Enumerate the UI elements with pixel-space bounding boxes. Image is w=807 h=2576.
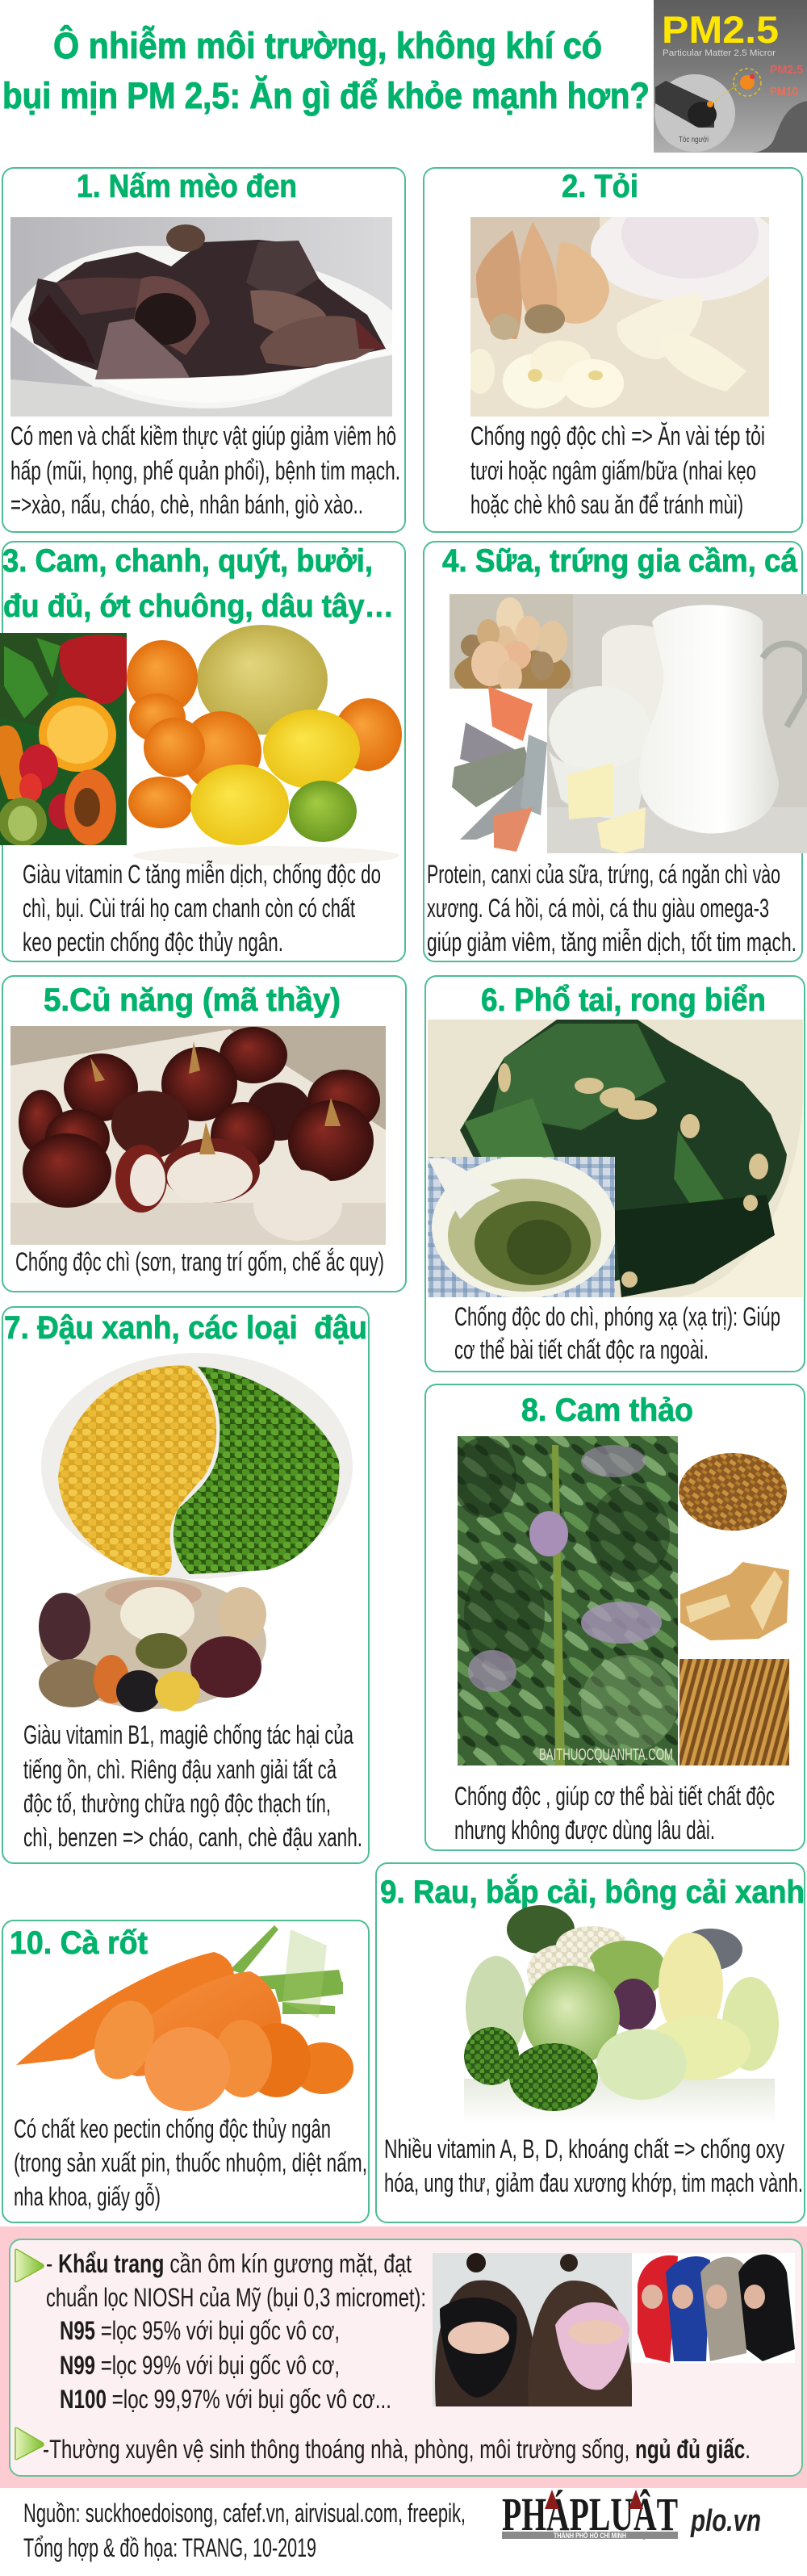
image: PM2.5 diagram: PM10: [770, 85, 798, 98]
image: colored balaclavas: [632, 2253, 795, 2363]
text 3: [23, 860, 381, 957]
advice: mask text: - Khẩu trang cần ôm kín gương mặt, đạt: [46, 2249, 412, 2278]
heading 2: 2. Tỏi: [562, 169, 638, 204]
heading 6: 6. Phổ tai, rong biển: [481, 982, 766, 1018]
text 7: Giàu vitamin B1, magiê chống tác hại của: [23, 1720, 353, 1749]
image: licorice slices: [680, 1562, 789, 1640]
image: carrots: [16, 1925, 353, 2111]
text 7: chì, benzen => cháo, canh, chè đậu xanh.: [23, 1823, 362, 1852]
text 10: [14, 2114, 367, 2211]
image: black fungus in bowl: [10, 217, 392, 417]
panel: 4 Sữa, trứng: [424, 542, 807, 961]
heading 10: 10. Cà rốt: [10, 1925, 148, 1961]
image: water chestnuts: [10, 1026, 386, 1245]
text 10: nha khoa, giấy gỗ): [14, 2182, 161, 2211]
image: PM2.5 diagram: Tóc người: [679, 136, 709, 145]
text 7: tiếng ồn, chì. Riêng đậu xanh giải tất cả: [23, 1755, 337, 1784]
text 5: Chống độc chì (sơn, trang trí gốm, chế ắc quy): [15, 1247, 384, 1276]
heading 1: 1. Nấm mèo đen: [77, 169, 297, 204]
text 2: [470, 421, 765, 519]
text 7: [23, 1720, 362, 1852]
text 10: Có chất keo pectin chống độc thủy ngân: [14, 2114, 331, 2143]
panel: 2 Tỏi: [424, 168, 802, 532]
title: Ô nhiễm môi trường, không khí có: [53, 25, 602, 66]
advice: mask text: N95 =lọc 95% với bụi gốc vô cơ,: [60, 2316, 340, 2345]
image: licorice plant: [452, 1436, 678, 1766]
advice: mask text: N99 =lọc 99% với bụi gốc vô cơ,: [60, 2351, 340, 2380]
text 3: chì, bụi. Cùi trái họ cam chanh còn có chất: [23, 894, 355, 923]
website: plo.vn: [690, 2504, 761, 2538]
title: bụi mịn PM 2,5: Ăn gì để khỏe mạnh hơn?: [2, 75, 650, 116]
source note: Tổng hợp & đồ họa: TRANG, 10-2019: [23, 2533, 316, 2562]
panel: 3 Cam, chanh: [0, 542, 405, 961]
image: licorice plant: BAITHUOCQUANHTA.COM: [539, 1746, 673, 1764]
image: PM2.5 diagram: [654, 0, 807, 153]
image: garlic: [470, 217, 769, 417]
text 7: độc tố, thường chữa ngộ độc thạch tín,: [23, 1789, 331, 1818]
image: milk jug, glass, yogurt and butter: [547, 594, 807, 853]
image: PM2.5 diagram: PM2.5: [770, 63, 803, 77]
image: seaweed soup inset: [428, 1156, 617, 1298]
advice: mask text: [46, 2249, 426, 2414]
image: licorice chips: [679, 1453, 787, 1531]
text 9: [384, 2134, 803, 2197]
source note: [23, 2499, 466, 2562]
image: citrus fruits: [127, 625, 402, 865]
text 1: [10, 421, 400, 519]
logo: Pháp Luật: THÀNH PHỐ HỒ CHÍ MINH: [554, 2531, 626, 2540]
advice: mask text: chuẩn lọc NIOSH của Mỹ (bụi 0,3 micromet):: [46, 2283, 426, 2312]
text 8: [454, 1782, 775, 1845]
logo: Pháp Luật: PHÁPLUẬT: [502, 2488, 678, 2540]
title: [2, 25, 650, 116]
text 3: keo pectin chống độc thủy ngân.: [23, 928, 283, 957]
heading 8: 8. Cam thảo: [521, 1393, 693, 1428]
image: assorted beans: [39, 1577, 266, 1712]
image: salmon and fish: [449, 686, 547, 853]
text 1: =>xào, nấu, cháo, chè, nhân bánh, giò xào..: [10, 490, 363, 519]
logo: Pháp Luật: [502, 2488, 678, 2540]
image: women wearing face masks: [433, 2253, 632, 2406]
heading 5: 5.Củ năng (mã thầy): [44, 982, 341, 1018]
text 10: (trong sản xuất pin, thuốc nhuộm, diệt nấm,: [14, 2148, 367, 2177]
image: PM2.5 diagram: PM2.5: [662, 8, 779, 51]
text 3: Giàu vitamin C tăng miễn dịch, chống độc do: [23, 860, 381, 889]
image: mixed fruit and vegetables: [0, 633, 127, 846]
panel: advice band: [0, 2226, 807, 2488]
heading 3: đu đủ, ớt chuông, dâu tây…: [3, 589, 394, 624]
image: seaweed bowl: [428, 1020, 803, 1297]
panel: 10 Cà rốt: [2, 1920, 369, 2222]
advice: ventilation text: -Thường xuyên vệ sinh thông thoáng nhà, phòng, môi trường sống, ngủ đủ giấc.: [43, 2435, 751, 2464]
icon: green arrow 2: [15, 2427, 44, 2460]
panel: 9 Rau, bắp cải: [376, 1863, 805, 2222]
panel: 1 Nấm mèo đen: [2, 168, 405, 532]
image: yin-yang bean bowl: [41, 1353, 353, 1579]
text 4: [427, 860, 797, 957]
image: cabbage and broccoli: [464, 1905, 779, 2123]
text 1: Có men và chất kiềm thực vật giúp giảm viêm hô: [10, 421, 396, 450]
text 1: hấp (mũi, họng, phế quản phổi), bệnh tim mạch.: [10, 456, 400, 485]
icon: green arrow 1: [15, 2249, 44, 2282]
image: licorice strips: [679, 1659, 789, 1766]
panel: 6 Phổ tai, rong biển: [425, 976, 805, 1372]
heading 3: 3. Cam, chanh, quýt, bưởi,: [2, 543, 373, 579]
heading 7: 7. Đậu xanh, các loại đậu: [4, 1310, 367, 1346]
source note: Nguồn: suckhoedoisong, cafef.vn, airvisual.com, freepik,: [23, 2499, 466, 2528]
heading 3: [2, 543, 394, 624]
panel: 8 Cam thảo: [425, 1384, 805, 1850]
image: PM2.5 diagram: Particular Matter 2.5 Micror: [663, 48, 776, 58]
panel: 5 Củ năng: [2, 976, 406, 1292]
panel: 7 Đậu xanh: [2, 1307, 369, 1863]
image: eggs in basket: [449, 594, 573, 689]
text 6: [454, 1302, 780, 1364]
advice: mask text: N100 =lọc 99,97% với bụi gốc vô cơ...: [60, 2385, 391, 2414]
